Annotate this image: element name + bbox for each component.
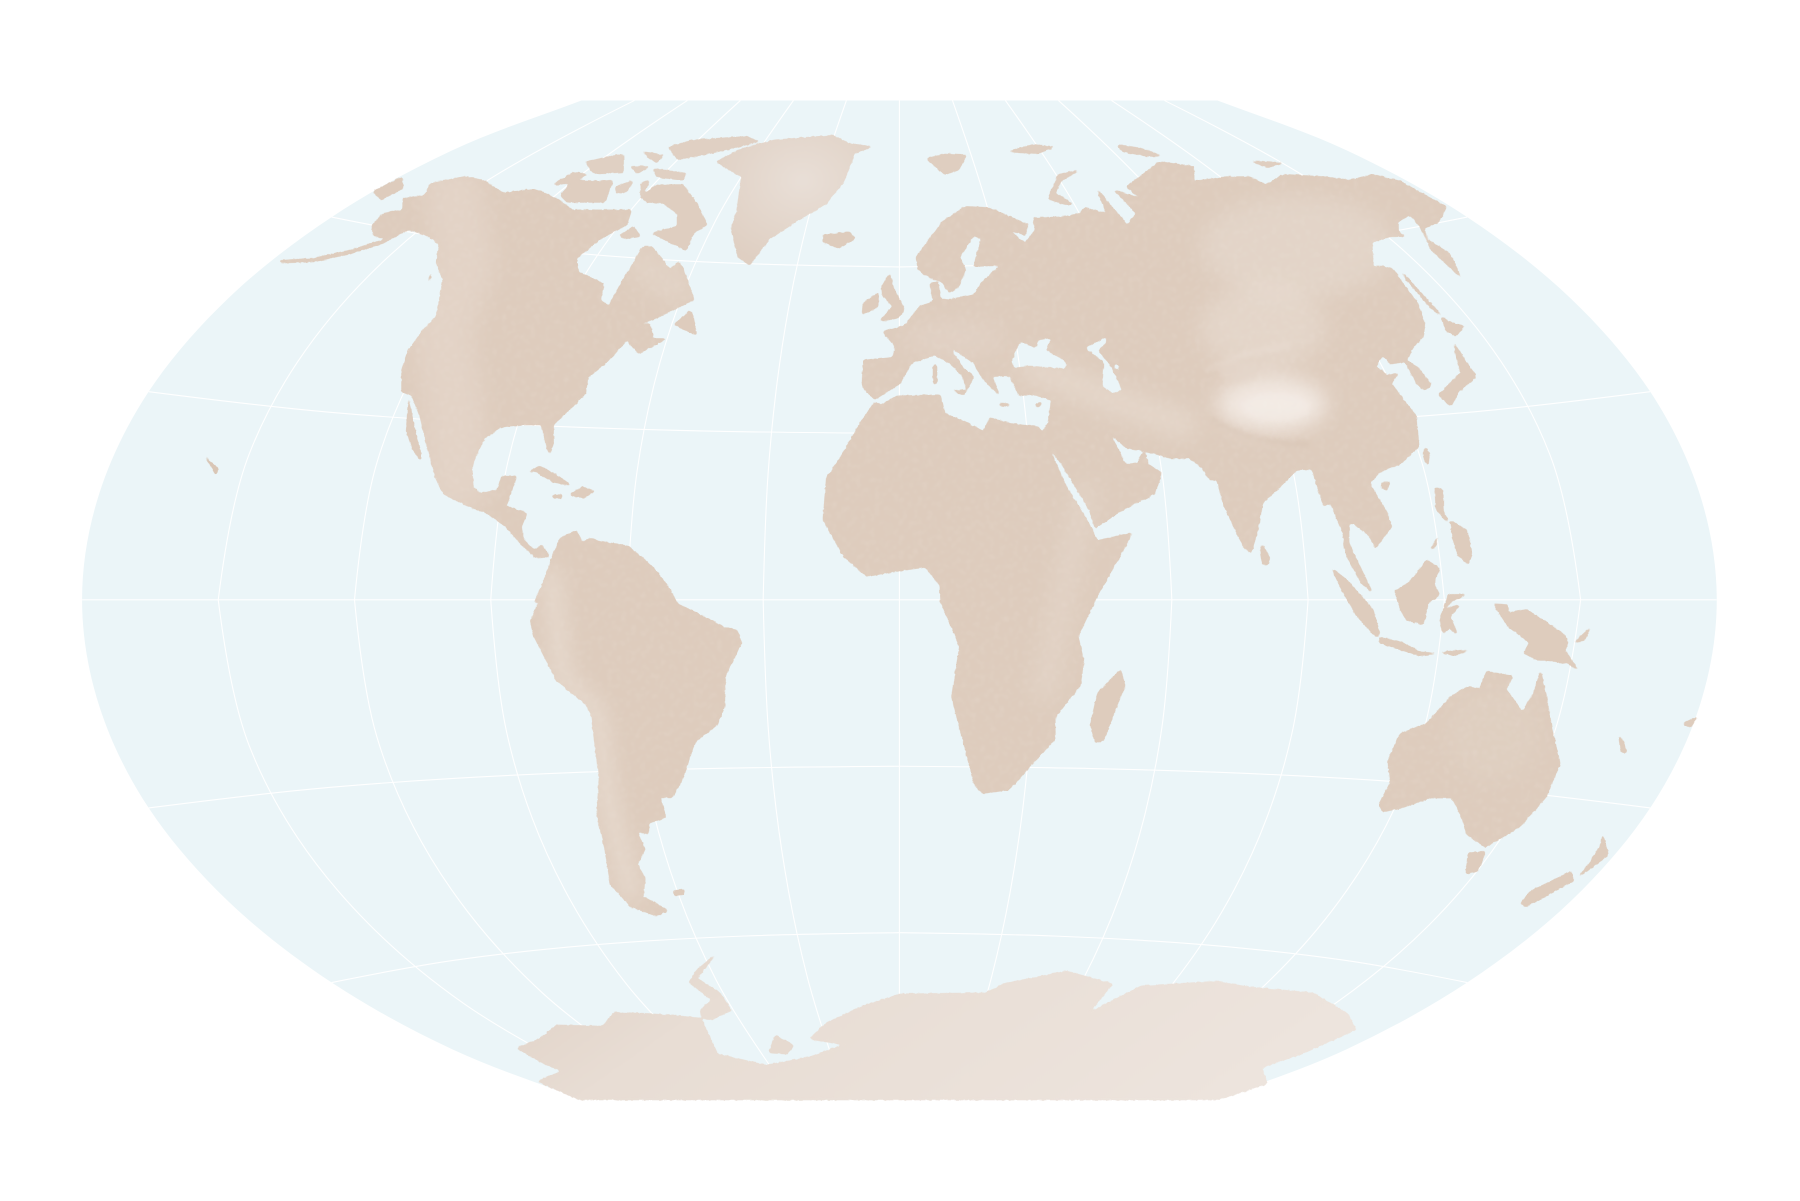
Southern Philippines bbox=[1450, 520, 1472, 565]
Hispaniola bbox=[569, 487, 595, 498]
Southampton Island bbox=[620, 226, 641, 239]
Jamaica bbox=[552, 495, 562, 498]
Sakhalin bbox=[1399, 269, 1443, 317]
Sardinia and Corsica bbox=[933, 365, 937, 383]
Great Britain bbox=[879, 273, 905, 321]
New Zealand South Island bbox=[1520, 871, 1574, 907]
Svalbard bbox=[926, 154, 967, 174]
Antarctica bbox=[517, 953, 1356, 1100]
Falkland Islands bbox=[673, 890, 684, 895]
terrain relief shading bbox=[416, 178, 1386, 902]
Victoria Island bbox=[560, 180, 613, 202]
Taiwan bbox=[1423, 447, 1429, 466]
Hokkaido bbox=[1441, 317, 1465, 336]
Crete bbox=[999, 403, 1010, 406]
Hawaii bbox=[202, 452, 218, 475]
Africa bbox=[823, 395, 1132, 793]
Sri Lanka bbox=[1260, 544, 1270, 565]
Borneo bbox=[1395, 560, 1440, 624]
Prince of Wales Island bbox=[615, 180, 634, 193]
Eurasia with Black, Caspian and Aral seas as holes bbox=[862, 162, 1461, 593]
Axel Heiberg Island bbox=[642, 152, 664, 163]
Iceland bbox=[823, 232, 855, 248]
Newfoundland bbox=[674, 310, 697, 335]
Lesser Sunda Islands bbox=[1440, 650, 1471, 655]
Cuba bbox=[528, 466, 572, 486]
Baja California bbox=[406, 396, 421, 461]
Luzon bbox=[1435, 487, 1449, 523]
Fiji area island bbox=[1683, 716, 1698, 728]
land masses bbox=[206, 134, 1698, 1101]
New Siberian Islands bbox=[1250, 161, 1285, 168]
Palawan bbox=[1430, 534, 1440, 550]
Franz Josef Land bbox=[1008, 145, 1055, 154]
world map bbox=[82, 100, 1717, 1101]
Melville Island bbox=[585, 154, 623, 173]
Madagascar bbox=[1091, 669, 1125, 743]
Tasmania bbox=[1466, 852, 1485, 874]
Devon Island bbox=[653, 169, 686, 180]
Sumatra bbox=[1332, 568, 1380, 637]
Novaya Zemlya bbox=[1048, 170, 1080, 204]
New Guinea bbox=[1493, 604, 1578, 670]
Bathurst Island bbox=[630, 166, 650, 173]
Banks Island bbox=[552, 172, 588, 185]
Honshu and Kyushu bbox=[1438, 342, 1476, 406]
Timor bbox=[1453, 653, 1475, 667]
Alexander Island bbox=[769, 1035, 794, 1054]
Greenland bbox=[716, 135, 872, 265]
Ireland bbox=[862, 293, 878, 315]
Java bbox=[1379, 637, 1440, 655]
New Caledonia bbox=[1619, 735, 1627, 753]
New Britain bbox=[1574, 627, 1591, 643]
graticule lines bbox=[82, 100, 1717, 1099]
Australia bbox=[1379, 670, 1560, 847]
Chukotka fragment bbox=[373, 177, 403, 200]
North America bbox=[280, 177, 695, 558]
Sulawesi bbox=[1440, 595, 1467, 635]
Vancouver Island bbox=[427, 273, 432, 285]
Sicily bbox=[952, 390, 968, 395]
New Zealand North Island bbox=[1577, 833, 1608, 878]
Somerset Island bbox=[641, 180, 650, 200]
Ellesmere Island bbox=[668, 137, 760, 160]
Hainan bbox=[1381, 482, 1390, 490]
South America bbox=[530, 530, 742, 916]
Baffin Island bbox=[642, 185, 707, 250]
Severnaya Zemlya bbox=[1117, 145, 1163, 156]
Cyprus bbox=[1034, 402, 1042, 408]
ocean: Winkel Tripel outline bbox=[82, 100, 1717, 1099]
